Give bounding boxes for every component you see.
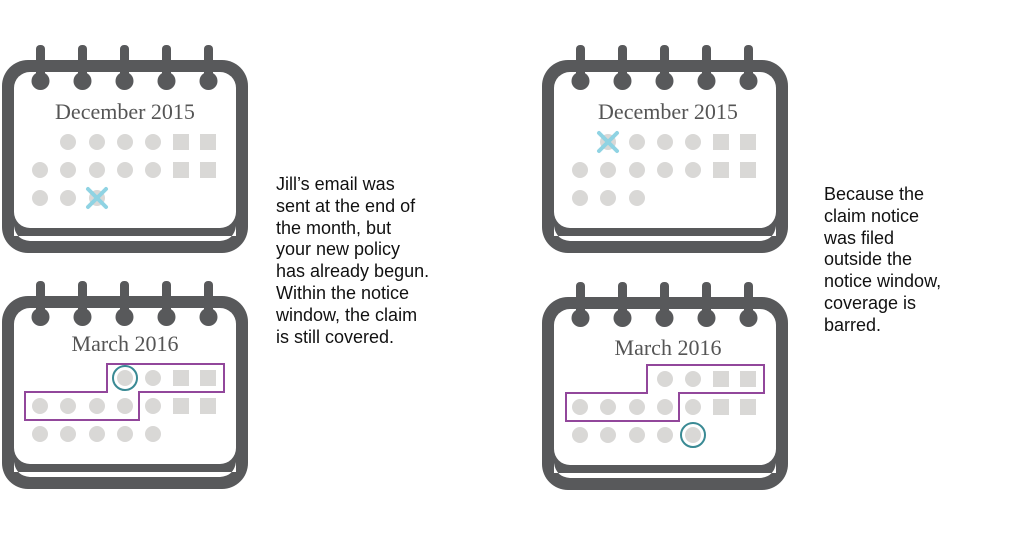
icon: teal circle	[113, 366, 137, 390]
icon: teal circle	[681, 423, 705, 447]
text: right explanation	[824, 184, 941, 335]
text: left explanation: Jill’s email was	[276, 174, 395, 194]
calendar: March 2016 (left)	[2, 281, 248, 489]
calendar: December 2015 (right)	[542, 45, 788, 253]
text: left explanation: window, the claim	[276, 305, 417, 325]
calendar: December 2015 (left): December 2015	[55, 99, 195, 124]
text: right explanation: Because the	[824, 184, 924, 204]
icon: blue X	[88, 189, 106, 207]
notice window outline	[566, 365, 764, 421]
calendar: December 2015 (right): December 2015	[598, 99, 738, 124]
calendar: March 2016 (right): March 2016	[615, 335, 721, 360]
text: left explanation	[276, 174, 429, 347]
text: left explanation: sent at the end of	[276, 196, 415, 216]
text: right explanation: claim notice	[824, 206, 919, 226]
text: left explanation: your new policy	[276, 239, 400, 259]
text: left explanation: Within the notice	[276, 283, 409, 303]
text: left explanation: has already begun.	[276, 261, 429, 281]
text: right explanation: notice window,	[824, 271, 941, 291]
notice window outline	[25, 364, 224, 420]
text: right explanation: coverage is	[824, 293, 916, 313]
icon: blue X	[599, 133, 617, 151]
text: right explanation: was filed	[824, 228, 894, 248]
calendar: March 2016 (right)	[542, 282, 788, 490]
text: left explanation: the month, but	[276, 218, 391, 238]
text: left explanation: is still covered.	[276, 327, 394, 347]
text: right explanation: barred.	[824, 315, 881, 335]
calendar: December 2015 (left)	[2, 45, 248, 253]
calendar: March 2016 (left): March 2016	[72, 331, 178, 356]
text: right explanation: outside the	[824, 249, 912, 269]
